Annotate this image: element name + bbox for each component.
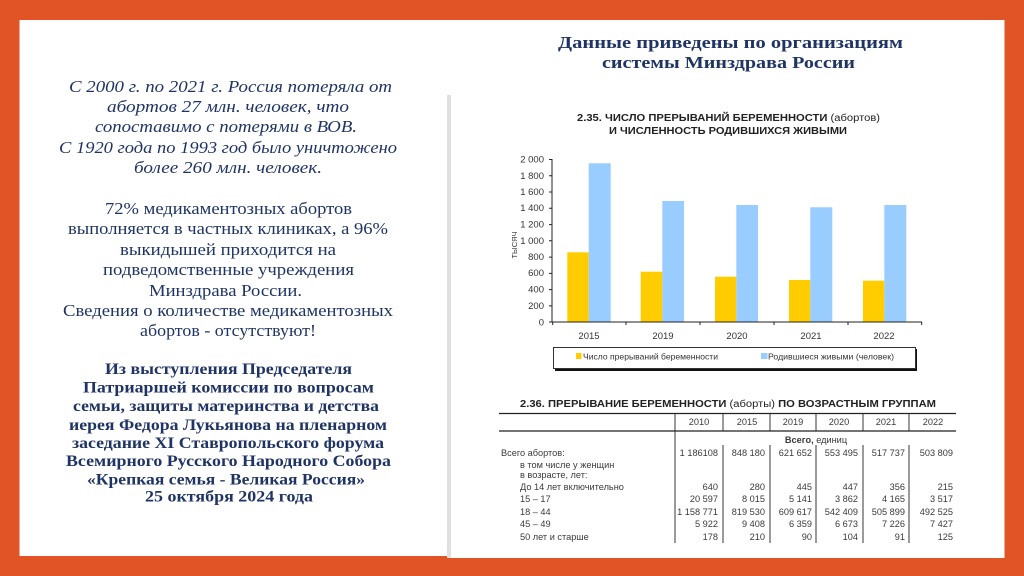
table values: 6 359 (789, 519, 812, 529)
table values: 553 495 (825, 448, 858, 458)
text block: source speech: Патриаршей комиссии по вопросам (83, 380, 374, 396)
y axis label: ТЫСЯЧ (510, 231, 519, 259)
table values: 4 165 (882, 494, 905, 504)
x axis: 2022 (873, 331, 895, 342)
table values: 447 (843, 482, 858, 492)
y axis: 1 000 (520, 236, 544, 247)
table header years: 2015 (737, 417, 757, 427)
table header years: 2021 (876, 417, 896, 427)
table values: 356 (890, 482, 905, 492)
table values: 492 525 (920, 507, 953, 517)
text block: medication abortions: подведомственные учреждения (103, 260, 354, 279)
bars: live births (589, 163, 906, 322)
table header years (689, 417, 943, 445)
y axis: 800 (528, 252, 544, 263)
text block: medication abortions: 72% медикаментозных абортов (105, 199, 352, 218)
table grid (499, 414, 956, 431)
table values: 819 530 (732, 507, 765, 517)
table header years: 2020 (829, 417, 849, 427)
table row labels (501, 448, 624, 542)
chart title: 2.35. ЧИСЛО ПРЕРЫВАНИЙ БЕРЕМЕННОСТИ (абортов) (577, 111, 880, 124)
table values: 609 617 (779, 507, 812, 517)
table header years: 2010 (689, 417, 709, 427)
table values: 20 597 (690, 494, 718, 504)
table values: 5 922 (695, 519, 718, 529)
y axis: 600 (528, 268, 544, 279)
text block: source speech (66, 361, 391, 506)
text block: source speech: «Крепкая семья - Великая Россия» (87, 472, 365, 488)
text block: losses: С 2000 г. по 2021 г. Россия потеряла от (69, 77, 392, 96)
table row labels: Всего абортов: (501, 448, 565, 458)
table title: 2.36. ПРЕРЫВАНИЕ БЕРЕМЕННОСТИ (аборты) ПО ВОЗРАСТНЫМ ГРУППАМ (520, 398, 936, 410)
table values (677, 448, 953, 542)
text block: losses: абортов 27 млн. человек, что (107, 97, 349, 116)
heading: data source: Данные приведены по организациям (558, 33, 903, 52)
y axis: 200 (528, 301, 544, 312)
legend: Число прерываний беременности (583, 352, 718, 362)
table values: 5 141 (789, 494, 812, 504)
table values: 621 652 (779, 448, 812, 458)
y axis (520, 154, 552, 328)
y axis: 1 600 (520, 187, 544, 198)
table row labels: 18 – 44 (520, 507, 551, 517)
table header years: 2022 (923, 417, 943, 427)
table values: 91 (895, 532, 905, 542)
x axis: 2021 (800, 331, 822, 342)
panel: bar chart 2.35 (510, 111, 922, 371)
legend (554, 348, 917, 371)
y axis: 1 800 (520, 171, 544, 182)
x axis: 2020 (726, 331, 748, 342)
table values: 178 (703, 532, 718, 542)
table values: 8 015 (742, 494, 765, 504)
table values: 3 517 (930, 494, 953, 504)
bars: pregnancy terminations (567, 252, 884, 322)
y axis: 1 200 (520, 220, 544, 230)
table values: 7 427 (930, 519, 953, 529)
table row labels: в возрасте, лет: (520, 470, 588, 480)
text block: source speech: семьи, защиты материнства и детства (73, 398, 379, 415)
x axis: 2015 (578, 331, 600, 342)
table values: 848 180 (732, 448, 765, 458)
panel: left text (59, 77, 397, 506)
table values: 210 (750, 532, 765, 542)
y axis: 0 (539, 318, 544, 328)
text block: source speech: иерея Федора Лукьянова на пленарном (69, 417, 388, 434)
chart title (577, 111, 880, 137)
heading: data source: системы Минздрава России (602, 53, 856, 72)
text block: losses: С 1920 года по 1993 год было уничтожено (59, 138, 397, 157)
table values: 445 (797, 482, 812, 492)
table values: 90 (802, 532, 812, 542)
text block: medication abortions: выполняется в частных клиниках, а 96% (68, 219, 388, 238)
text block: medication abortions (63, 199, 394, 340)
table values: 503 809 (920, 448, 953, 458)
x axis: 2019 (652, 331, 674, 342)
text block: losses: более 260 млн. человек. (134, 158, 322, 177)
table values: 9 408 (742, 519, 765, 529)
y axis: 2 000 (520, 154, 544, 166)
table row labels: 50 лет и старше (520, 532, 589, 542)
text block: losses (59, 77, 397, 177)
table values: 215 (938, 482, 953, 492)
table header years: 2019 (783, 417, 803, 427)
table values: 104 (843, 532, 858, 542)
table values: 125 (938, 532, 953, 542)
heading: data source (558, 33, 903, 72)
table values: 7 226 (882, 519, 905, 529)
y axis: 1 400 (520, 203, 544, 214)
legend: Родившиеся живыми (человек) (768, 352, 894, 362)
text block: medication abortions: Сведения о количестве медикаментозных (63, 301, 394, 320)
table row labels: 15 – 17 (520, 494, 551, 504)
text block: losses: сопоставимо с потерями в ВОВ. (95, 117, 357, 136)
table values: 542 409 (825, 507, 858, 517)
table values: 1 158 771 (677, 507, 718, 517)
text block: source speech: Всемирного Русского Народного Собора (66, 453, 391, 470)
text block: source speech: Из выступления Председателя (105, 361, 352, 378)
table values: 640 (703, 482, 718, 492)
table values: 280 (750, 482, 765, 492)
chart title: И ЧИСЛЕННОСТЬ РОДИВШИХСЯ ЖИВЫМИ (609, 126, 847, 137)
table values: 505 899 (872, 507, 905, 517)
table values: 6 673 (835, 519, 858, 529)
text block: source speech: 25 октября 2024 года (145, 488, 313, 506)
table row labels: 45 – 49 (520, 519, 551, 529)
table values: 3 862 (835, 494, 858, 504)
text block: source speech: заседание XI Ставропольского форума (72, 435, 384, 452)
text block: medication abortions: Минздрава России. (149, 281, 302, 300)
table row labels: До 14 лет включительно (520, 482, 624, 492)
table values: 1 186108 (680, 448, 718, 458)
y axis: 400 (528, 284, 544, 296)
panel: table 2.36 (499, 398, 956, 543)
x axis (552, 322, 922, 342)
text block: medication abortions: выкидышей приходится на (120, 240, 337, 259)
table values: 517 737 (872, 448, 905, 458)
text block: medication abortions: абортов - отсутствуют! (140, 321, 316, 340)
table row labels: в том числе у женщин (520, 460, 614, 470)
table header years: Всего, единиц (785, 435, 848, 445)
